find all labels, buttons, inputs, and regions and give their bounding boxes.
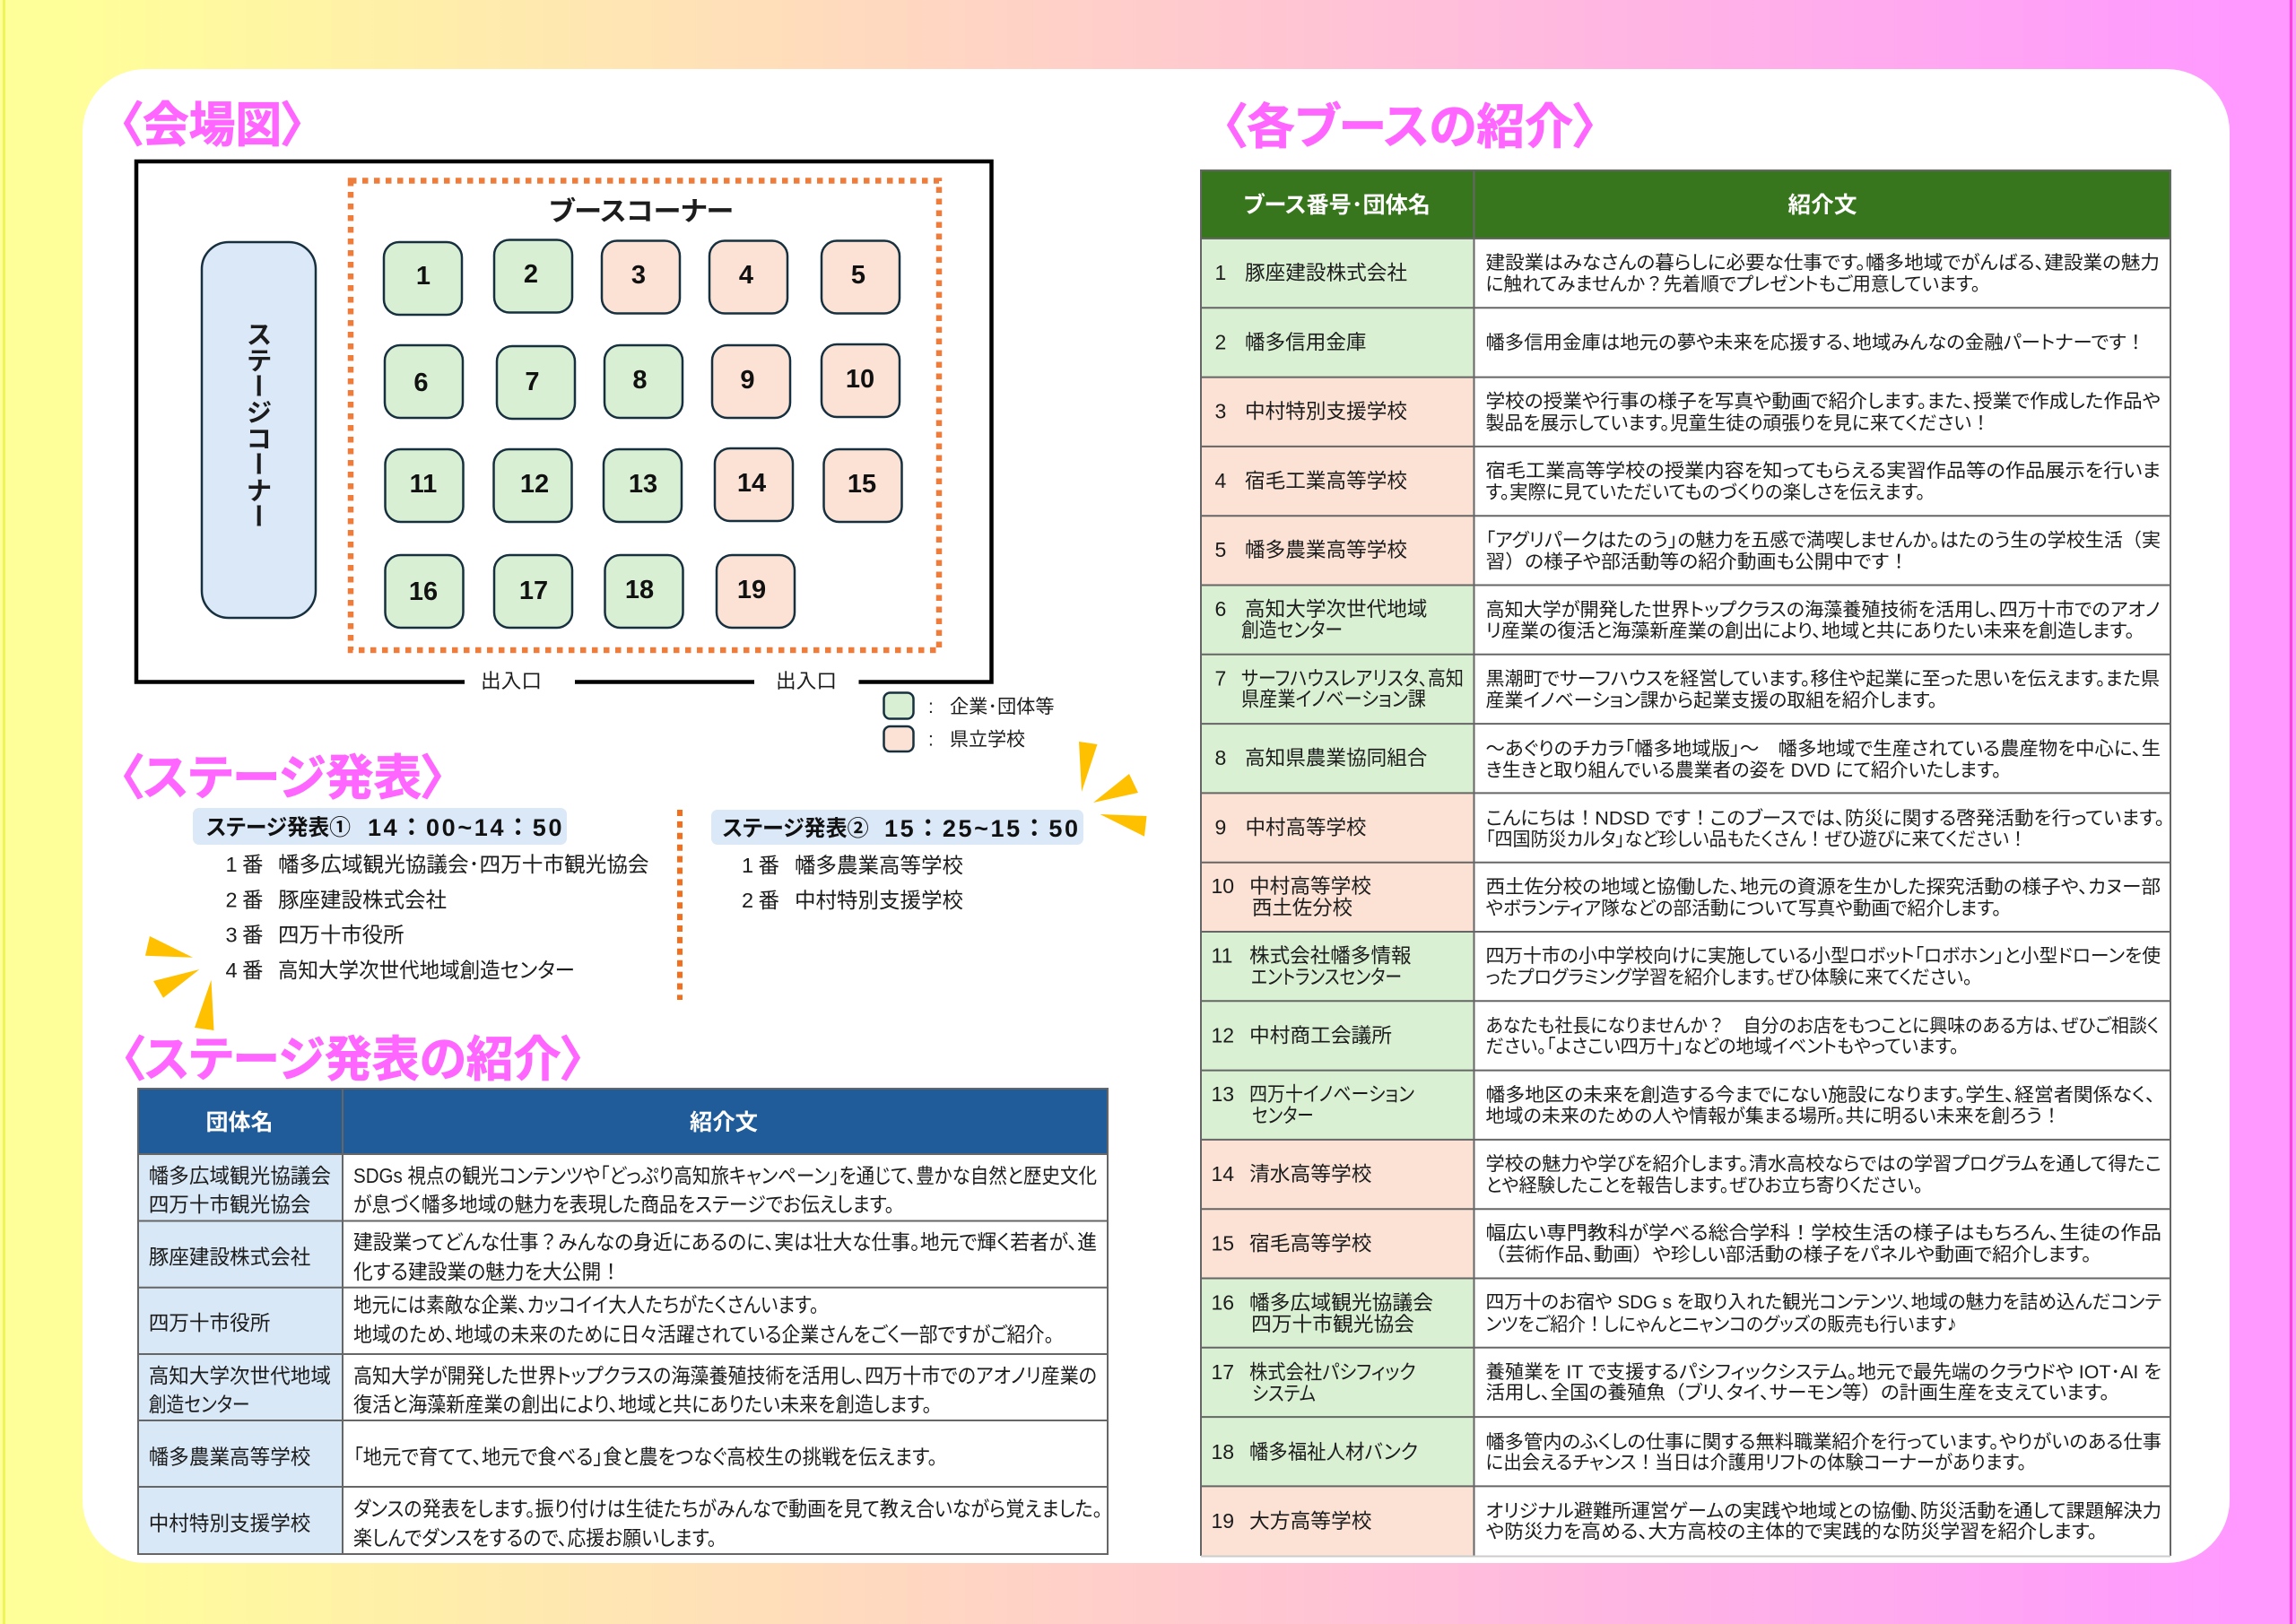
booth 6: 高知大学が開発した世界トップクラスの海藻養殖技術を活用し、四万十市でのアオノ xyxy=(1485,600,2160,621)
stage presentation 2 xyxy=(711,810,1083,912)
legend: 企業･団体等 xyxy=(950,697,1055,717)
row: tourism association: が息づく幡多地域の魅力を表現した商品をステージでお伝えします。 xyxy=(353,1193,894,1216)
row: special support school xyxy=(149,1498,1102,1550)
booth 4 xyxy=(1214,461,2161,503)
booth 12: 中村商工会議所 xyxy=(1249,1024,1392,1047)
booths: 8 xyxy=(632,366,648,395)
booth corner label: ブースコーナー xyxy=(549,196,734,227)
row: city hall: 地域のため、地域の未来のために日々活躍されている企業さんをごく一部ですがご紹介。 xyxy=(353,1323,1054,1346)
booth 17: 養殖業を IT で支援するパシフィックシステム。地元で最先端のクラウドや IOT･AI を xyxy=(1485,1362,2161,1383)
presentation list 2: 幡多農業高等学校 xyxy=(795,854,963,877)
booth 15: （芸術作品、動画 ）や珍しい部活動の様子をパネルや動画で紹介します。 xyxy=(1485,1245,2092,1265)
row: kochi university: 高知大学が開発した世界トップクラスの海藻養殖技術を活用し、四万十市でのアオノリ産業の xyxy=(353,1364,1097,1387)
booth introduction table xyxy=(1201,170,2170,1557)
table header: 紹介文 xyxy=(690,1110,758,1135)
booth 18: に出会えるチャンス！当日は介護用リフトの体験コーナーがあります。 xyxy=(1485,1453,2027,1473)
booths: 12 xyxy=(520,470,549,499)
time pill 2: ステージ発表② xyxy=(723,816,869,841)
table header: ブース番号･団体名 xyxy=(1243,192,1431,218)
booth 7 xyxy=(1214,667,2160,711)
legend xyxy=(884,692,1055,751)
booth 13: 地域の未来のための人や情報が集まる場所。共に明るい未来を創ろう！ xyxy=(1485,1107,2061,1126)
booths: 4 xyxy=(739,261,753,290)
booth 8: ～あぐりのチカラ「幡多地域版」～ 幡多地域で生産されている農産物を中心に、生 xyxy=(1485,739,2161,760)
presentation list 1 xyxy=(226,853,649,982)
row: agricultural high school: 幡多農業高等学校 xyxy=(149,1446,310,1469)
booth 1: 1 xyxy=(1214,261,1226,284)
booth 14: 14 xyxy=(1211,1162,1234,1185)
booth 5: 5 xyxy=(1214,538,1226,561)
booth 10: やボランティア隊などの部活動について写真や動画で紹介します。 xyxy=(1485,899,2002,919)
booth 15: 幅広い専門教科が学べる総合学科 ！学校生活の様子はもちろん、生徒の作品 xyxy=(1485,1223,2161,1244)
stage introduction table xyxy=(138,1089,1108,1554)
booth 7: 県産業イノベーション課 xyxy=(1241,689,1426,710)
booths: 5 xyxy=(851,261,865,290)
presentation list 2 xyxy=(742,854,963,912)
booths: 6 xyxy=(413,369,429,397)
booth 11: ったプログラミング学習を紹介します。ぜひ体験に来てください。 xyxy=(1485,968,1972,988)
row: tourism association: 幡多広域観光協議会 xyxy=(149,1164,331,1187)
booth 8: き生きと取り組んでいる農業者の姿を DVD にて紹介いたします。 xyxy=(1485,760,2002,781)
time pill 2 xyxy=(711,810,1083,845)
booths: 15 xyxy=(848,470,876,499)
booth 8: 高知県農業協同組合 xyxy=(1245,747,1427,769)
table header: 団体名 xyxy=(206,1110,273,1135)
booth 18 xyxy=(1211,1432,2161,1473)
row: city hall: 四万十市役所 xyxy=(149,1311,270,1334)
presentation list 1: 四万十市役所 xyxy=(278,924,404,947)
booth 5: 習）の様子や部活動等の紹介動画も公開中です ！ xyxy=(1485,552,1909,572)
icon: sparkle left xyxy=(145,936,213,1030)
booth 10: 西土佐分校の地域と協働した、地元の資源を生かした探究活動の様子や、カヌー部 xyxy=(1485,877,2161,898)
row: special support school: 楽しんでダンスをするので、応援お願いします。 xyxy=(353,1526,717,1550)
booth 15: 15 xyxy=(1211,1232,1234,1255)
booth 17 xyxy=(1211,1360,2161,1405)
entrance label left: 出入口 xyxy=(481,670,542,692)
table grid xyxy=(138,1089,1108,1554)
heading: venue map: 〈会場図〉 xyxy=(119,99,305,152)
booth 1 xyxy=(1214,253,2160,295)
table grid xyxy=(1201,170,2170,1556)
row: construction company: 建設業ってどんな仕事？みんなの身近にあるのに、実は壮大な仕事。地元で輝く若者が、進 xyxy=(353,1230,1097,1254)
booth 16: 四万十のお宿や SDG s を取り入れた観光コンテンツ、地域の魅力を詰め込んだコンテ xyxy=(1485,1292,2161,1313)
booths: 13 xyxy=(629,470,657,499)
booths: 1 xyxy=(416,262,430,291)
row: kochi university: 高知大学次世代地域 xyxy=(149,1364,331,1387)
stage corner: ステージコーナー xyxy=(242,321,271,529)
row: agricultural high school: 「地元で育てて、地元で食べる」食と農をつなぐ高校生の挑戦を伝えます。 xyxy=(353,1446,937,1469)
booth 2: 2 xyxy=(1214,330,1226,353)
first column fill xyxy=(138,1154,343,1554)
booth 17: 活用し、全国の養殖魚（ブリ、タイ、サーモン等）の計画生産を支えています。 xyxy=(1485,1383,2109,1403)
booth 4: 宿毛工業高等学校 xyxy=(1245,470,1407,492)
stage presentation 1 xyxy=(193,808,649,982)
row: tourism association xyxy=(149,1164,1097,1216)
booth 9: 中村高等学校 xyxy=(1245,816,1367,839)
booth 11: 株式会社幡多情報 xyxy=(1249,945,1412,967)
booths: 18 xyxy=(625,576,654,604)
booth 7: サーフハウスレアリスタ、高知 xyxy=(1241,667,1464,690)
time pill 1: ステージ発表① xyxy=(206,815,351,840)
booth 12: 12 xyxy=(1211,1024,1234,1047)
booth 15 xyxy=(1211,1223,2161,1265)
booth 14: 学校の魅力や学びを紹介します。清水高校ならではの学習プログラムを通して得たこ xyxy=(1485,1154,2161,1175)
presentation list 1: 高知大学次世代地域創造センター xyxy=(278,959,575,982)
heading: stage presentations: 〈ステージ発表〉 xyxy=(119,751,446,805)
booth 6: リ産業の復活と海藻新産業の創出により、地域と共にありたい未来を創造します。 xyxy=(1485,621,2135,642)
booth 4: 宿毛工業高等学校の授業内容を知ってもらえる実習作品等の作品展示を行いま xyxy=(1485,461,2161,482)
booth 19 xyxy=(1211,1501,2161,1542)
presentation list 2: 2番 xyxy=(742,889,779,912)
booth 14 xyxy=(1211,1154,2161,1196)
booth 7: 産業イノベーション課から起業支援の取組を紹介します。 xyxy=(1485,690,1937,711)
booth 5 xyxy=(1214,531,2161,572)
booth 16: 16 xyxy=(1211,1291,1234,1315)
time pill 1: 14：00~14：50 xyxy=(368,814,561,841)
booth 13: 13 xyxy=(1211,1082,1234,1106)
row: tourism association: SDGs 視点の観光コンテンツや「どっぷり高知旅キャンペーン」を通じて、豊かな自然と歴史文化 xyxy=(353,1164,1097,1187)
presentation list 1: 幡多広域観光協議会･四万十市観光協会 xyxy=(278,853,649,876)
booths: 7 xyxy=(525,368,540,396)
booth 16: 四万十市観光協会 xyxy=(1251,1313,1414,1336)
booth 5: 幡多農業高等学校 xyxy=(1245,539,1407,561)
booth 16 xyxy=(1211,1291,2161,1336)
legend: : xyxy=(928,730,934,750)
booth 10: 中村高等学校 xyxy=(1249,875,1371,898)
booth 3: 製品を展示しています。児童生徒の頑張りを見に来てください！ xyxy=(1485,413,1990,434)
first column fills xyxy=(1201,239,1474,1556)
booth 18: 18 xyxy=(1211,1440,1234,1463)
table header xyxy=(1201,170,2170,239)
booths: 19 xyxy=(737,576,766,604)
booth 1: 建設業はみなさんの暮らしに必要な仕事です。幡多地域でがんばる、建設業の魅力 xyxy=(1485,253,2160,274)
booth 2 xyxy=(1214,330,2145,353)
booth 8 xyxy=(1214,739,2161,781)
booth 4: 4 xyxy=(1214,469,1227,492)
table bottom edge xyxy=(1201,1555,2170,1557)
booth 17: 株式会社パシフィック xyxy=(1249,1361,1416,1384)
booth 15: 宿毛高等学校 xyxy=(1249,1232,1372,1255)
booth 10: 10 xyxy=(1211,874,1234,898)
heading: booth introduction: 〈各ブースの紹介〉 xyxy=(1222,100,1597,154)
dotted divider xyxy=(677,810,683,1000)
presentation list 1: 1番 xyxy=(226,853,264,876)
row: special support school: 中村特別支援学校 xyxy=(149,1512,310,1535)
stage corner xyxy=(202,242,316,618)
booth 12 xyxy=(1211,1016,2160,1057)
icon: sparkle right xyxy=(1079,742,1146,837)
booth 10: 西土佐分校 xyxy=(1252,897,1352,919)
booth 13: センター xyxy=(1252,1105,1314,1127)
time pill 2: 15：25~15：50 xyxy=(884,815,1078,842)
booth 4: す。実際に見ていただいてものづくりの楽しさを伝えます。 xyxy=(1485,482,1925,503)
booth corner dotted frame xyxy=(351,181,939,650)
presentation list 1: 豚座建設株式会社 xyxy=(278,888,447,911)
booth 19: 19 xyxy=(1211,1509,1234,1533)
booths: 11 xyxy=(410,470,437,499)
booth 3 xyxy=(1214,391,2161,434)
presentation list 2: 1番 xyxy=(742,854,779,877)
booths: 14 xyxy=(737,469,766,498)
row: city hall xyxy=(149,1293,1054,1346)
presentation list 1: 3番 xyxy=(226,924,264,947)
booth 16: ンツをご紹介！しにゃんとニャンコのグッズの販売も行います♪ xyxy=(1485,1312,1957,1336)
booth 3: 3 xyxy=(1214,400,1226,423)
row: construction company: 豚座建設株式会社 xyxy=(149,1245,310,1268)
presentation list 2: 中村特別支援学校 xyxy=(795,889,963,912)
row: agricultural high school xyxy=(149,1446,937,1469)
entrance label right: 出入口 xyxy=(776,670,837,692)
booths xyxy=(384,240,902,628)
row: tourism association: 四万十市観光協会 xyxy=(149,1193,310,1216)
booth 11: エントランスセンター xyxy=(1251,967,1402,988)
booths: 2 xyxy=(524,260,538,289)
booth 2: 幡多信用金庫は地元の夢や未来を応援する、地域みんなの金融パートナーです ！ xyxy=(1485,333,2145,353)
booths: 17 xyxy=(519,577,548,605)
row: construction company: 化する建設業の魅力を大公開！ xyxy=(353,1260,621,1283)
venue map xyxy=(136,161,992,692)
booths: 9 xyxy=(740,366,755,395)
booth 19: オリジナル避難所運営ゲームの実践や地域との協働、防災活動を通して課題解決力 xyxy=(1485,1501,2161,1522)
booth 1: に触れてみませんか？先着順でプレゼントもご用意しています。 xyxy=(1485,274,1980,295)
booth 10 xyxy=(1211,874,2161,919)
booths: 16 xyxy=(409,578,438,606)
booth 11: 四万十市の小中学校向けに実施している小型ロボット「ロボホン」と小型ドローンを使 xyxy=(1485,946,2161,967)
booth 11: 11 xyxy=(1211,943,1232,967)
booth 14: 清水高等学校 xyxy=(1249,1163,1372,1185)
booths: 3 xyxy=(631,261,646,290)
booth 19: や防災力を高める、大方高校の主体的で実践的な防災学習を紹介します。 xyxy=(1485,1522,2097,1542)
booth 7: 黒潮町でサーフハウスを経営しています。移住や起業に至った思いを伝えます。また県 xyxy=(1485,669,2160,690)
booth 2: 幡多信用金庫 xyxy=(1245,332,1367,353)
booth 17: システム xyxy=(1252,1383,1316,1405)
booth 7: 7 xyxy=(1214,667,1226,690)
booth 1: 豚座建設株式会社 xyxy=(1245,262,1407,284)
booth 16: 幡多広域観光協議会 xyxy=(1249,1291,1433,1315)
booths: 10 xyxy=(846,365,874,394)
row: construction company xyxy=(149,1230,1097,1283)
booth 3: 中村特別支援学校 xyxy=(1245,400,1407,423)
booth 6: 6 xyxy=(1214,597,1226,621)
time pill 1 xyxy=(193,808,567,845)
row: special support school: ダンスの発表をします。振り付けは生徒たちがみんなで動画を見て教え合いながら覚えました。 xyxy=(353,1498,1102,1521)
hall outline xyxy=(136,161,992,682)
booth 12: あなたも社長になりませんか？ 自分のお店をもつことに興味のある方は、ぜひご相談く xyxy=(1485,1016,2160,1037)
booth 6 xyxy=(1214,597,2160,642)
booth 19: 大方高等学校 xyxy=(1249,1510,1372,1533)
booth 9: こんにちは！NDSD です！このブースでは、防災に関する啓発活動を行っています。 xyxy=(1485,809,2165,829)
row: kochi university xyxy=(149,1364,1097,1416)
booth 13: 四万十イノベーション xyxy=(1249,1083,1414,1106)
row: kochi university: 創造センター xyxy=(149,1393,250,1416)
presentation list 1: 2番 xyxy=(226,888,264,911)
booth 8: 8 xyxy=(1214,746,1226,769)
booth 3: 学校の授業や行事の様子を写真や動画で紹介します。また、授業で作成した作品や xyxy=(1485,391,2161,413)
booth 6: 創造センター xyxy=(1241,619,1343,642)
table header xyxy=(138,1089,1108,1154)
legend: : xyxy=(928,697,934,717)
row: kochi university: 復活と海藻新産業の創出により、地域と共にありたい未来を創造します。 xyxy=(353,1393,932,1416)
booth 5: 「アグリパークはたのう」の魅力を五感で満喫しませんか。はたのう生の学校生活（実 xyxy=(1485,531,2161,551)
heading: stage introduction: 〈ステージ発表の紹介〉 xyxy=(121,1033,585,1087)
booth 13 xyxy=(1211,1082,2155,1127)
booth 14: とや経験したことを報告します。ぜひお立ち寄りください。 xyxy=(1485,1176,1923,1196)
legend: 県立学校 xyxy=(950,730,1025,750)
booth 9: 「四国防災カルタ」など珍しい品もたくさん！ぜひ遊びに来てください！ xyxy=(1485,829,2027,850)
booth 9: 9 xyxy=(1214,816,1226,839)
presentation list 1: 4番 xyxy=(226,959,264,982)
booth 18: 幡多福祉人材バンク xyxy=(1249,1441,1418,1463)
booth 11 xyxy=(1211,943,2161,988)
booth 6: 高知大学次世代地域 xyxy=(1245,598,1427,621)
booth 17: 17 xyxy=(1211,1360,1234,1384)
booth 18: 幡多管内のふくしの仕事に関する無料職業紹介を行っています。やりがいのある仕事 xyxy=(1485,1432,2161,1453)
booth 9 xyxy=(1214,809,2165,850)
booth 12: ださい。「よさこい四万十」などの地域イベントもやっています。 xyxy=(1485,1037,1959,1057)
row: city hall: 地元には素敵な企業、カッコイイ大人たちがたくさんいます。 xyxy=(353,1293,819,1316)
booth 13: 幡多地区の未来を創造する今までにない施設になります。学生、経営者関係なく、 xyxy=(1485,1085,2155,1106)
table header: 紹介文 xyxy=(1788,193,1857,218)
